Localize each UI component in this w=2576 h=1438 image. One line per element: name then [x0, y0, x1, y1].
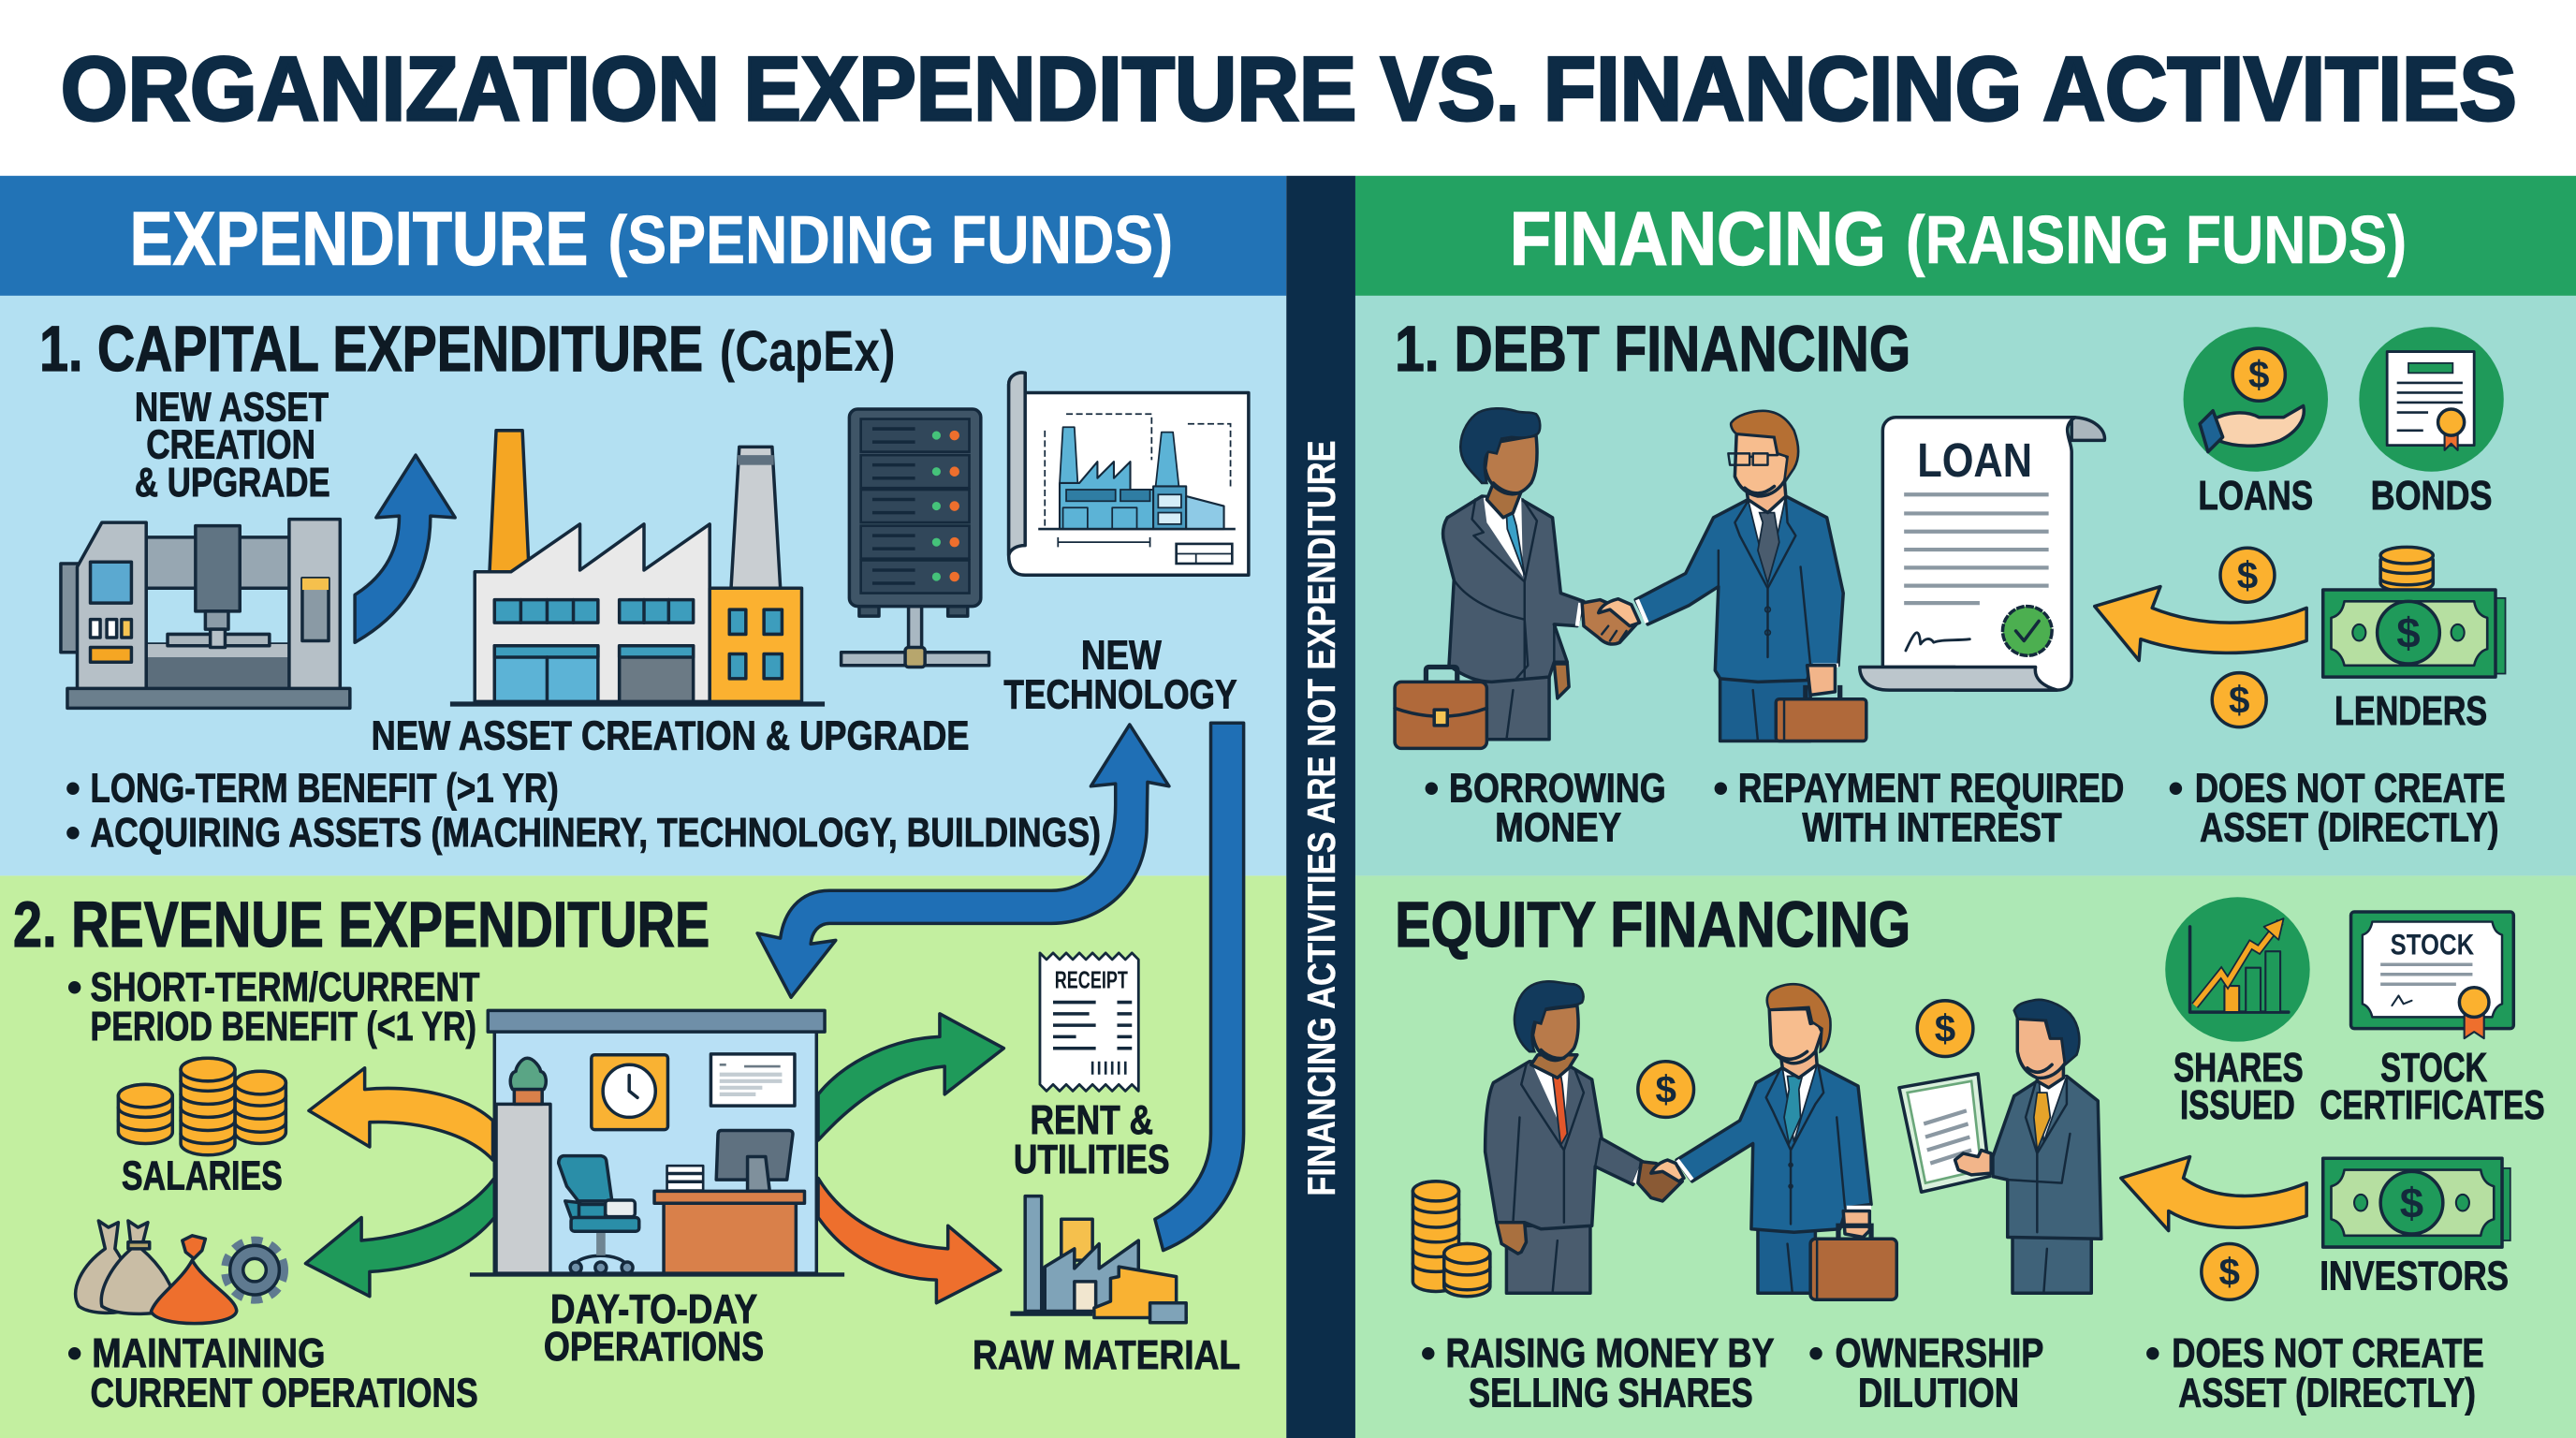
bullet: raising money by selling shares: •	[1421, 1330, 1436, 1376]
label: investors: INVESTORS	[2320, 1254, 2509, 1299]
label: new technology: TECHNOLOGY	[1003, 671, 1237, 717]
heading: capex abbreviation: (CapEx)	[720, 319, 896, 384]
icon: receipt: RECEIPT	[1055, 968, 1128, 994]
bullet: does not create asset: DOES NOT CREATE	[2172, 1330, 2484, 1376]
bullet: short term benefit: PERIOD BENEFIT (<1 YR)	[91, 1004, 476, 1049]
icon: bond certificate	[2359, 327, 2504, 472]
icon: loan document	[1860, 418, 2104, 690]
icon: salary coin stacks	[118, 1058, 285, 1155]
icon: stock certificate	[2351, 912, 2513, 1038]
panel: revenue expenditure	[0, 875, 1286, 1438]
icon: handshake	[1638, 1160, 1684, 1201]
label: stock certificates: STOCK	[2380, 1045, 2487, 1091]
panel: financing header	[1355, 176, 2576, 296]
label: new asset creation and upgrade stacked: NEW ASSET	[135, 384, 329, 430]
icon: raw material factory	[1010, 1196, 1186, 1323]
heading: financing: FINANCING	[1510, 198, 1886, 282]
label: day-to-day operations: DAY-TO-DAY	[550, 1286, 757, 1332]
panel: divider bar	[1286, 176, 1355, 1438]
icon: CNC machine	[61, 520, 350, 708]
label: shares issued	[2174, 1045, 2304, 1128]
bullet: does not create asset: •	[2145, 1330, 2160, 1376]
icon: server rack	[842, 409, 989, 668]
icon: coin stacks	[1412, 1181, 1490, 1297]
heading: expenditure: EXPENDITURE	[130, 198, 588, 282]
bullet: raising money by selling shares	[1421, 1330, 1775, 1416]
icon: handshake	[1582, 599, 1640, 644]
title band	[0, 0, 2576, 176]
figure: company representative in blue suit	[1676, 984, 1871, 1293]
icon: raw material sacks, pile and gear	[76, 1221, 281, 1324]
arrow: to rent and utilities	[818, 1014, 1003, 1140]
arrow: funds from lenders	[2095, 587, 2306, 661]
icon: dollar coin between figures	[1638, 1062, 1694, 1117]
bullet: borrowing money: MONEY	[1495, 805, 1621, 851]
icon: briefcase	[1395, 668, 1486, 748]
bullet: does not create asset: DOES NOT CREATE	[2195, 765, 2506, 811]
bullet: ownership dilution: OWNERSHIP	[1835, 1330, 2043, 1376]
icon: factory	[450, 431, 825, 707]
panel: debt financing	[1355, 296, 2576, 875]
bullet: ownership dilution: •	[1808, 1330, 1823, 1376]
icon: stock certificate: STOCK	[2391, 928, 2474, 961]
bullets: capex characteristics: LONG-TERM BENEFIT (>1 YR)	[91, 765, 559, 811]
figure: lender in blue suit with glasses	[1635, 411, 1843, 741]
icon: loans hand and coin	[2184, 327, 2328, 472]
label: new technology	[1003, 632, 1237, 717]
label: stock certificates	[2320, 1045, 2545, 1128]
figure: investor in grey suit	[1486, 981, 1643, 1293]
label: new asset creation and upgrade stacked: CREATION	[146, 422, 315, 468]
arrow: funds from investors	[2121, 1157, 2306, 1231]
label: new asset creation and upgrade: NEW ASSET CREATION & UPGRADE	[372, 712, 970, 758]
figure: borrower in grey suit	[1443, 408, 1584, 740]
arrow: to current operations	[305, 1178, 494, 1297]
heading: capital expenditure: 1. CAPITAL EXPENDITURE	[39, 313, 703, 385]
label: shares issued: SHARES	[2174, 1045, 2304, 1091]
bullet: maintaining operations	[67, 1330, 478, 1416]
bullet: borrowing money: •	[1425, 765, 1439, 811]
bullet: does not create asset	[2145, 1330, 2484, 1416]
icon: share certificate held	[1899, 1074, 1991, 1192]
arrow: two-way flow between day-to-day operations and new technology	[757, 725, 1169, 997]
label: rent and utilities	[1014, 1097, 1170, 1182]
icon: loans hand and coin: $	[2248, 353, 2269, 396]
bullet: maintaining operations: •	[67, 1330, 81, 1376]
bullet: does not create asset	[2169, 765, 2506, 851]
icon: lender banknote and coins	[2323, 547, 2506, 677]
label: financing activities are not expenditure: FINANCING ACTIVITIES ARE NOT EXPENDITURE	[1299, 440, 1343, 1196]
arrow: raw material up to capital expenditure	[1155, 723, 1244, 1251]
label: rent and utilities: UTILITIES	[1014, 1137, 1170, 1182]
bullet: borrowing money	[1425, 765, 1666, 851]
arrow: to raw material	[818, 1178, 1001, 1303]
panel: equity financing	[1355, 875, 2576, 1438]
bullet: does not create asset: ASSET (DIRECTLY)	[2178, 1370, 2476, 1416]
icon: dollar coin lower	[2212, 673, 2266, 727]
bullet: does not create asset: •	[2169, 765, 2183, 811]
bullet: ownership dilution: DILUTION	[1858, 1370, 2019, 1416]
bullet: maintaining operations: CURRENT OPERATIONS	[91, 1370, 478, 1416]
arrow: upward asset growth	[355, 455, 455, 642]
label: new asset creation and upgrade stacked: & UPGRADE	[135, 460, 330, 506]
label: salaries: SALARIES	[122, 1153, 283, 1199]
icon: dollar coin lower: $	[2218, 1250, 2240, 1293]
heading: raising funds: (RAISING FUNDS)	[1906, 203, 2407, 278]
bullet: does not create asset: ASSET (DIRECTLY)	[2200, 805, 2499, 851]
label: day-to-day operations	[544, 1286, 764, 1370]
label: raw material: RAW MATERIAL	[973, 1332, 1240, 1378]
illustration: office	[470, 1010, 844, 1277]
icon: dollar coin between figures: $	[1655, 1068, 1676, 1111]
label: day-to-day operations: OPERATIONS	[544, 1324, 764, 1370]
bullet: short term benefit: SHORT-TERM/CURRENT	[91, 964, 480, 1010]
icon: dollar coin lower	[2202, 1244, 2258, 1299]
bullet: borrowing money: BORROWING	[1449, 765, 1666, 811]
label: new asset creation and upgrade stacked	[135, 384, 330, 506]
bullet: short term benefit	[67, 964, 480, 1049]
heading: revenue expenditure: 2. REVENUE EXPENDITURE	[13, 888, 710, 961]
label: bonds: BONDS	[2371, 473, 2492, 519]
panel: expenditure header	[0, 176, 1286, 296]
title: ORGANIZATION EXPENDITURE VS. FINANCING ACTIVITIES	[61, 39, 2517, 139]
bullets: capex characteristics	[66, 765, 1101, 856]
icon: briefcase right	[1776, 685, 1866, 741]
label: shares issued: ISSUED	[2180, 1082, 2295, 1128]
icon: investor banknote	[2323, 1158, 2510, 1247]
icon: briefcase	[1810, 1225, 1896, 1299]
label: lenders: LENDERS	[2334, 688, 2487, 734]
icon: lender banknote and coins: $	[2396, 609, 2421, 656]
bullet: maintaining operations: MAINTAINING	[92, 1330, 326, 1376]
label: new technology: NEW	[1081, 632, 1162, 678]
bullet: repayment required: REPAYMENT REQUIRED	[1738, 765, 2124, 811]
heading: equity financing: EQUITY FINANCING	[1395, 888, 1910, 961]
bullet: repayment required: •	[1714, 765, 1728, 811]
icon: factory blueprint	[1009, 373, 1249, 575]
arrow: to salaries	[309, 1068, 493, 1160]
label: rent and utilities: RENT &	[1030, 1097, 1153, 1143]
panel: capital expenditure	[0, 296, 1286, 875]
figure: shareholder in teal suit with certificate	[1993, 1000, 2101, 1293]
bullets: capex characteristics: •	[66, 810, 80, 856]
icon: investor banknote: $	[2400, 1179, 2423, 1226]
icon: dollar coin lower: $	[2229, 679, 2249, 722]
bullet: ownership dilution	[1808, 1330, 2043, 1416]
label: loans: LOANS	[2198, 473, 2313, 519]
bullet: repayment required	[1714, 765, 2124, 851]
icon: shares issued growth chart	[2165, 897, 2310, 1042]
icon: dollar coin upper: $	[1935, 1007, 1955, 1050]
bullet: repayment required: WITH INTEREST	[1802, 805, 2062, 851]
bullets: capex characteristics: ACQUIRING ASSETS (MACHINERY, TECHNOLOGY, BUILDINGS)	[91, 810, 1101, 856]
bullet: raising money by selling shares: RAISING MONEY BY	[1445, 1330, 1775, 1376]
icon: dollar coin upper	[1917, 1001, 1973, 1056]
heading: debt financing: 1. DEBT FINANCING	[1395, 313, 1910, 385]
icon: dollar coin upper	[2220, 548, 2275, 602]
heading: spending funds: (SPENDING FUNDS)	[607, 203, 1173, 278]
bullet: raising money by selling shares: SELLING SHARES	[1469, 1370, 1753, 1416]
label: loan: LOAN	[1917, 433, 2032, 487]
icon: receipt	[1040, 953, 1138, 1091]
bullets: capex characteristics: •	[66, 765, 80, 811]
bullet: short term benefit: •	[67, 964, 81, 1010]
icon: dollar coin upper: $	[2237, 553, 2258, 596]
